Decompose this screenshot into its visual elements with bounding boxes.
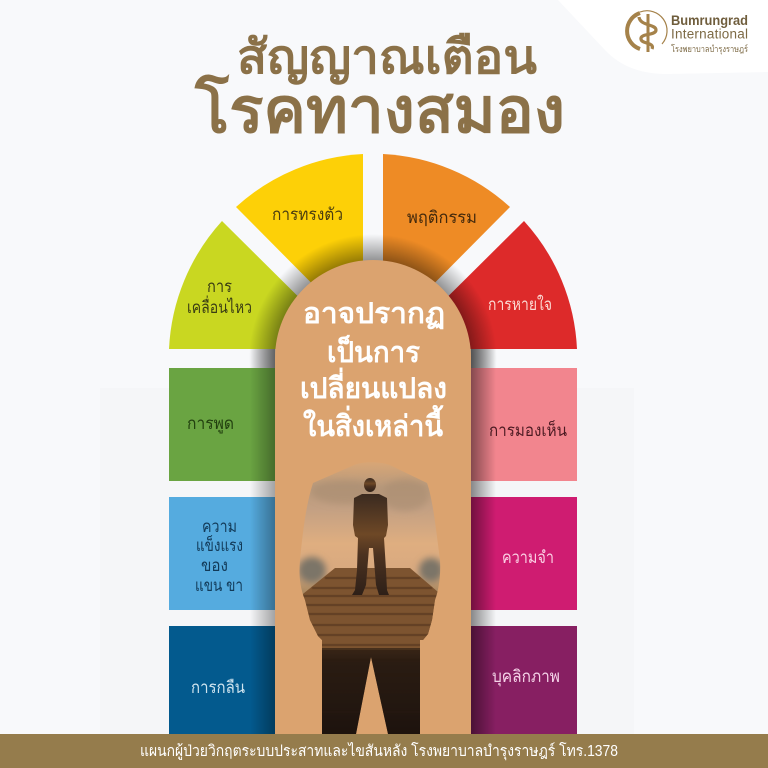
arch segment: behaviour [383, 154, 510, 335]
block: limb strength: แข็งแรง [196, 534, 243, 555]
footer bar [0, 734, 768, 768]
suit silhouette [300, 462, 440, 734]
arch segment: posture: การทรงตัว [272, 205, 343, 224]
clouds [298, 479, 443, 583]
block: limb strength: ความ [202, 517, 237, 536]
central pillar [275, 260, 471, 734]
logo wordmark: Bumrungrad [671, 12, 748, 28]
block: memory: ความจำ [502, 548, 554, 567]
pillar heading: อาจปรากฏ [303, 298, 445, 330]
block: limb strength: ของ [201, 556, 228, 575]
title [194, 30, 565, 146]
arch segment: movement [169, 221, 351, 349]
pillar heading: ในสิ่งเหล่านี้ [303, 404, 444, 443]
pillar heading [300, 298, 447, 443]
arch segment: breathing: การหายใจ [488, 294, 552, 314]
arch segment: posture [236, 154, 363, 335]
right pillar shadow [471, 349, 496, 734]
logo subtitle: International [671, 26, 748, 42]
block: personality [471, 626, 577, 734]
block: vision [471, 368, 577, 481]
pillar heading: เป็นการ [327, 334, 420, 369]
logo: Bumrungrad International [627, 11, 748, 55]
block: swallowing [169, 626, 275, 734]
logo icon: caduceus [627, 11, 667, 52]
block: limb strength: แขน ขา [195, 576, 243, 595]
footer bar: แผนกผู้ป่วยวิกฤตระบบประสาทและไขสันหลัง โรงพยาบาลบำรุงราษฎร์ โทร.1378 [140, 742, 618, 761]
block: speech [169, 368, 275, 481]
standing man [352, 478, 389, 595]
dark trouser shade [318, 648, 426, 734]
arch shadow [169, 145, 577, 368]
background panel [100, 388, 634, 734]
block: limb strength [169, 497, 275, 610]
arch segment: movement: การ [207, 277, 232, 296]
arch segment: breathing [395, 221, 577, 349]
wooden pier [298, 568, 445, 650]
block: swallowing: การกลืน [191, 678, 245, 697]
title line 2: โรคทางสมอง [194, 73, 565, 146]
double-exposure figure [298, 462, 445, 734]
pillar heading: เปลี่ยนแปลง [300, 367, 447, 405]
logo thai name: โรงพยาบาลบำรุงราษฎร์ [671, 43, 748, 55]
block: speech: การพูด [187, 414, 234, 434]
arch segment: movement: เคลื่อนไหว [187, 295, 252, 317]
logo corner panel [558, 0, 768, 74]
arch segment: behaviour: พฤติกรรม [407, 208, 477, 227]
left pillar shadow [250, 349, 275, 734]
title line 1: สัญญาณเตือน [237, 30, 537, 85]
block: personality: บุคลิกภาพ [492, 667, 560, 687]
block: memory [471, 497, 577, 610]
block: vision: การมองเห็น [489, 419, 567, 440]
